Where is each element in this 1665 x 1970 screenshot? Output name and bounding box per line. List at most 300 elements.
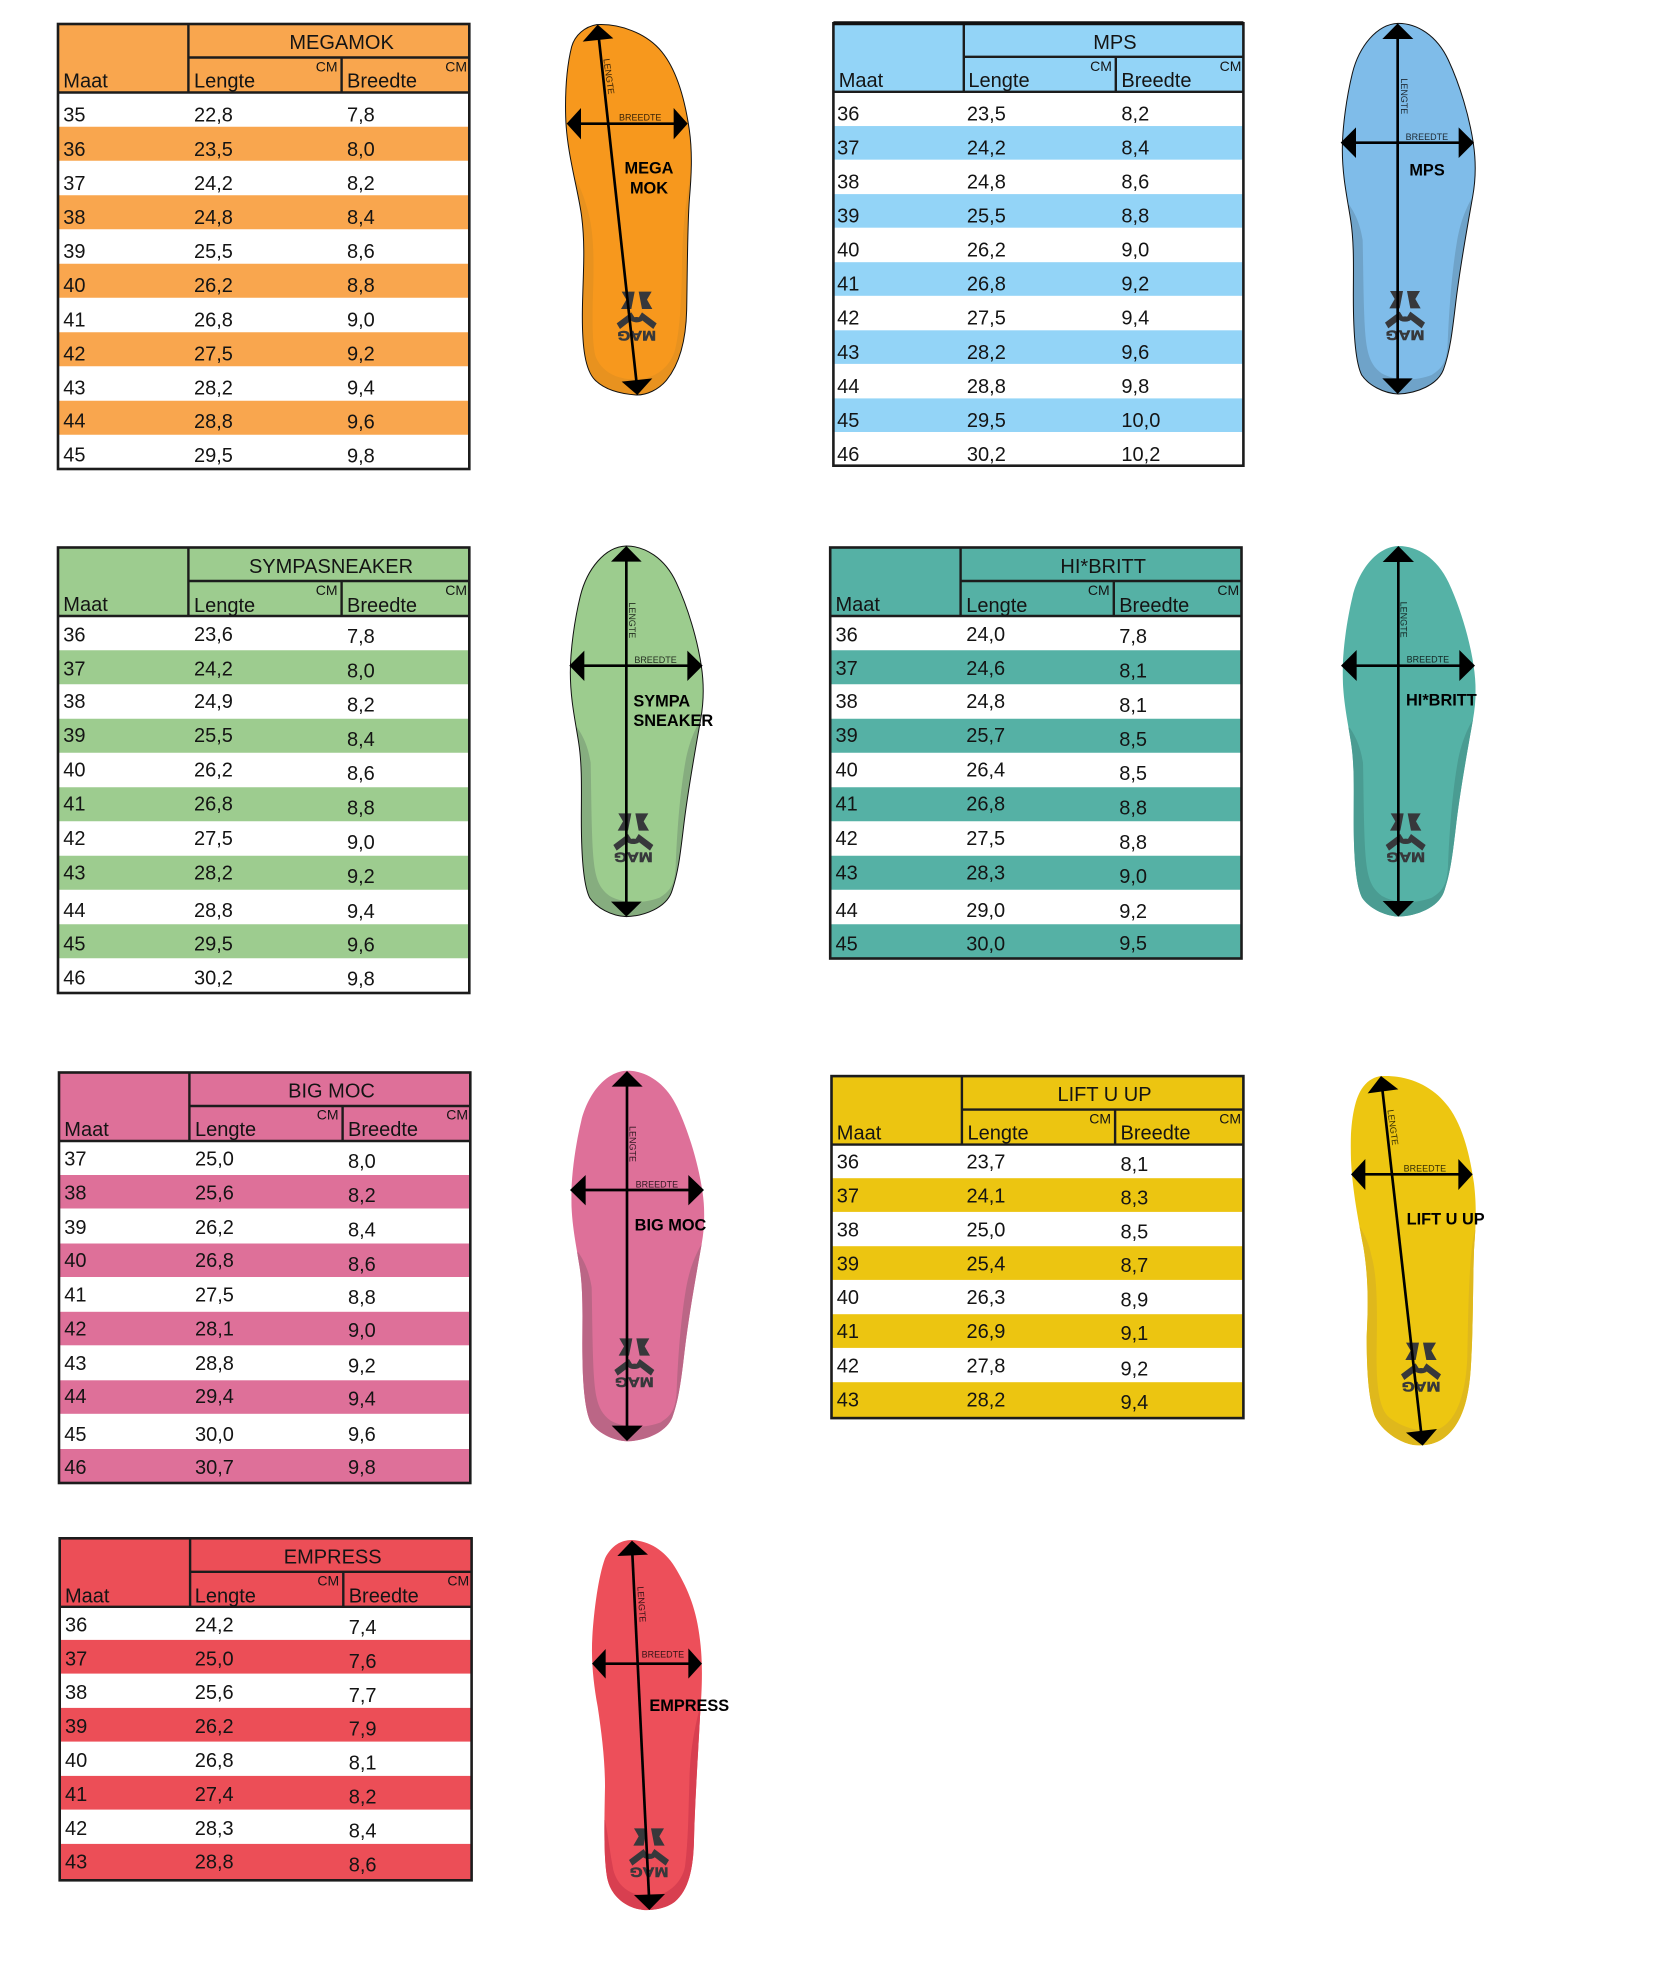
arrow: width — [592, 1648, 702, 1679]
table data: 9,2 — [1120, 1358, 1148, 1380]
table data: 9,0 — [348, 1320, 376, 1342]
table data: 37 — [836, 658, 858, 680]
table data: 26,4 — [966, 759, 1005, 781]
table data: 42 — [837, 1356, 859, 1378]
table data: 45 — [63, 933, 86, 955]
label: model name: SNEAKER — [633, 712, 713, 730]
table data: 7,7 — [349, 1685, 377, 1707]
arrow: length — [1382, 23, 1413, 394]
table data: 29,5 — [967, 410, 1006, 432]
column headers: CM — [1090, 58, 1112, 74]
table data: 7,4 — [349, 1617, 377, 1639]
table data: 25,0 — [195, 1148, 234, 1170]
table data: 8,6 — [1121, 171, 1149, 193]
table data: 8,4 — [1121, 137, 1149, 159]
sole body — [571, 1070, 704, 1442]
table data: 27,8 — [966, 1356, 1005, 1378]
column headers: Maat — [65, 1586, 110, 1608]
table data: 8,1 — [1120, 1154, 1148, 1176]
icon: MAG logo: MAG — [617, 328, 656, 344]
arrow: length — [1368, 1076, 1437, 1446]
label: breedte: BREEDTE — [634, 655, 677, 665]
insole: EMPRESS — [592, 1540, 728, 1910]
label: lengte: LENGTE — [1399, 602, 1409, 638]
table data: 37 — [65, 1648, 87, 1670]
label: lengte: LENGTE — [601, 58, 616, 95]
column headers: CM — [1219, 1110, 1241, 1126]
label: model name: HI*BRITT — [1406, 692, 1477, 710]
table data: 45 — [836, 933, 858, 955]
table data: 37 — [63, 658, 86, 680]
table data — [63, 624, 375, 990]
table data: 27,5 — [966, 828, 1005, 850]
table data: 8,2 — [347, 173, 375, 195]
table data: 8,8 — [1121, 206, 1149, 228]
table data: 25,5 — [194, 725, 233, 747]
table data: 37 — [837, 137, 859, 159]
table data: 7,6 — [349, 1651, 377, 1673]
table data: 8,1 — [1119, 660, 1147, 682]
table data: 28,8 — [195, 1353, 234, 1375]
heading: EMPRESS — [284, 1546, 382, 1568]
table data: 7,9 — [349, 1719, 377, 1741]
table data: 30,0 — [195, 1424, 234, 1446]
table data: 36 — [837, 103, 859, 125]
table data: 40 — [65, 1750, 87, 1772]
table data: 23,6 — [194, 624, 233, 646]
header band — [830, 548, 1242, 616]
table data: 9,4 — [1121, 308, 1149, 330]
table data: 24,0 — [966, 624, 1005, 646]
table data: 26,9 — [966, 1321, 1005, 1343]
table data: 8,4 — [349, 1820, 377, 1842]
table data: 8,8 — [1119, 832, 1147, 854]
column headers: CM — [316, 59, 338, 75]
table data: 25,0 — [195, 1648, 234, 1670]
sole body — [1342, 546, 1476, 917]
striped rows — [60, 1640, 472, 1880]
column headers: Breedte — [349, 1586, 419, 1608]
table data: 8,0 — [347, 139, 375, 161]
table data: 40 — [836, 759, 858, 781]
table data: 26,2 — [967, 240, 1006, 262]
table data: 9,8 — [347, 446, 375, 468]
table data: 10,2 — [1121, 444, 1160, 466]
table data: 40 — [837, 240, 859, 262]
table data: 43 — [837, 1389, 859, 1411]
table data: 8,2 — [1121, 103, 1149, 125]
column headers: CM — [1217, 582, 1239, 598]
table data: 42 — [63, 828, 86, 850]
header band — [58, 548, 469, 616]
heading: LIFT U UP — [1057, 1084, 1152, 1106]
column headers: CM — [1089, 1110, 1111, 1126]
table data: 28,2 — [194, 378, 233, 400]
table data: 29,5 — [194, 445, 233, 467]
column headers: Lengte — [194, 595, 255, 617]
table data: 9,4 — [1120, 1392, 1148, 1414]
table data: 8,2 — [347, 695, 375, 717]
table data: 38 — [64, 1183, 87, 1205]
icon: MAG logo: MAG — [1402, 1379, 1440, 1395]
column headers — [63, 59, 467, 93]
table data: 8,4 — [348, 1219, 376, 1241]
table data: 8,0 — [347, 660, 375, 682]
icon: MAG logo — [614, 1338, 654, 1391]
table data: 42 — [837, 308, 859, 330]
table data: 26,2 — [195, 1716, 234, 1738]
table data: 39 — [65, 1716, 87, 1738]
table data: 8,2 — [349, 1787, 377, 1809]
table data: 27,4 — [195, 1784, 234, 1806]
table data: 26,2 — [194, 759, 233, 781]
table data: 46 — [63, 968, 86, 990]
heading: MEGAMOK — [289, 32, 394, 54]
table data: 28,2 — [966, 1389, 1005, 1411]
label: breedte: BREEDTE — [619, 112, 661, 122]
table data: 28,3 — [966, 862, 1005, 884]
insole: SYMPA SNEAKER — [569, 546, 713, 918]
table data: 9,0 — [347, 832, 375, 854]
label: breedte: BREEDTE — [1404, 1164, 1446, 1174]
table data — [64, 1148, 376, 1479]
table data: 8,6 — [347, 763, 375, 785]
striped rows — [58, 650, 469, 958]
table data: 8,5 — [1120, 1221, 1148, 1243]
table data: 44 — [63, 411, 86, 433]
table data: 38 — [837, 171, 859, 193]
column headers — [837, 1110, 1241, 1145]
table data: 9,0 — [347, 309, 375, 331]
table data: 39 — [837, 206, 859, 228]
table data: 24,8 — [966, 691, 1005, 713]
icon: MAG logo: MAG — [1386, 327, 1424, 343]
table data: 26,8 — [967, 274, 1006, 296]
icon: MAG logo: MAG — [630, 1865, 668, 1881]
table data: 38 — [837, 1219, 859, 1241]
table data: 8,2 — [348, 1185, 376, 1207]
header band — [60, 1538, 472, 1607]
table data: 27,5 — [194, 828, 233, 850]
table data: 44 — [836, 900, 858, 922]
column headers: Breedte — [1120, 1123, 1191, 1145]
icon: MAG logo — [1401, 1343, 1441, 1395]
heading: HI*BRITT — [1060, 556, 1146, 578]
table data: 24,2 — [194, 658, 233, 680]
table data: 24,8 — [967, 171, 1006, 193]
table data: 25,4 — [966, 1253, 1005, 1275]
table data: 25,5 — [967, 206, 1006, 228]
icon: MAG logo — [1385, 291, 1425, 343]
table data: 41 — [837, 1321, 859, 1343]
table data: 8,3 — [1120, 1187, 1148, 1209]
column headers: Breedte — [347, 71, 417, 93]
label: breedte: BREEDTE — [642, 1650, 684, 1660]
insole: LIFT U UP — [1350, 1076, 1484, 1446]
table data: 9,2 — [347, 343, 375, 365]
icon: MAG logo — [617, 292, 657, 344]
table data: 9,4 — [348, 1389, 376, 1411]
table data: 7,8 — [1119, 626, 1147, 648]
arrow: length — [583, 25, 652, 395]
table data: 28,8 — [195, 1852, 234, 1874]
table data: 10,0 — [1121, 410, 1160, 432]
striped rows — [59, 1175, 470, 1483]
table data: 8,7 — [1120, 1255, 1148, 1277]
striped rows — [830, 650, 1242, 958]
heel rim — [1348, 720, 1473, 917]
table data: 36 — [836, 625, 858, 647]
table data: 8,8 — [1119, 798, 1147, 820]
table data: 7,8 — [347, 105, 375, 127]
table data: 9,2 — [347, 866, 375, 888]
table: MEGAMOK — [58, 24, 469, 469]
table data: 9,6 — [347, 935, 375, 957]
table data: 39 — [836, 725, 858, 747]
table data: 45 — [63, 445, 86, 467]
column headers: Lengte — [195, 1119, 256, 1141]
table data: 9,0 — [1119, 866, 1147, 888]
arrow: length — [617, 1541, 665, 1910]
sole outline — [1342, 23, 1475, 394]
table data: 24,1 — [966, 1186, 1005, 1208]
table data: 40 — [63, 759, 86, 781]
heel rim — [1348, 198, 1472, 394]
heading: BIG MOC — [288, 1080, 375, 1102]
sole outline — [566, 25, 691, 395]
table data: 8,5 — [1119, 763, 1147, 785]
table data: 40 — [63, 275, 86, 297]
insole: BIG MOC — [570, 1070, 706, 1442]
table data: 37 — [837, 1186, 859, 1208]
table data: 37 — [64, 1148, 87, 1170]
header band — [58, 24, 469, 92]
label: lengte: LENGTE — [628, 1126, 638, 1162]
label: model name: LIFT U UP — [1407, 1210, 1485, 1228]
table data: 9,5 — [1119, 933, 1147, 955]
table data: 26,2 — [194, 275, 233, 297]
sole body — [1342, 24, 1475, 380]
table: BIG MOC — [59, 1072, 470, 1483]
table data: 45 — [837, 410, 859, 432]
table data: 28,2 — [967, 342, 1006, 364]
table: HI*BRITT — [830, 548, 1242, 958]
column headers: Lengte — [968, 1123, 1029, 1145]
table data: 37 — [63, 173, 86, 195]
table data: 30,7 — [195, 1457, 234, 1479]
heel rim — [576, 721, 700, 916]
header band — [832, 1076, 1243, 1145]
table data: 42 — [65, 1818, 87, 1840]
table data: 44 — [64, 1386, 87, 1408]
arrow: width — [1351, 1159, 1473, 1190]
column headers: Breedte — [347, 595, 417, 617]
table data: 26,2 — [195, 1217, 234, 1239]
table data: 23,5 — [194, 139, 233, 161]
sole body — [592, 1540, 702, 1910]
column headers: CM — [445, 59, 467, 75]
label: lengte: LENGTE — [1399, 78, 1409, 114]
table data: 38 — [63, 691, 86, 713]
column headers — [839, 58, 1241, 92]
column headers: Maat — [839, 70, 884, 92]
striped rows — [833, 126, 1243, 432]
column headers — [836, 582, 1239, 617]
table data: 8,4 — [347, 729, 375, 751]
table data: 24,6 — [966, 658, 1005, 680]
table data: 23,7 — [966, 1152, 1005, 1174]
label: model name — [624, 160, 674, 198]
table data: 9,1 — [1120, 1323, 1148, 1345]
column headers: Maat — [63, 71, 108, 93]
header band — [59, 1072, 470, 1141]
insole: MPS — [1340, 22, 1476, 394]
table data: 45 — [64, 1424, 87, 1446]
table data — [63, 105, 375, 468]
column headers: CM — [446, 1107, 468, 1123]
arrow: width — [567, 108, 688, 139]
table data: 8,6 — [349, 1854, 377, 1876]
table data: 30,0 — [966, 933, 1005, 955]
table data: 26,8 — [194, 309, 233, 331]
table data: 9,6 — [347, 412, 375, 434]
arrow: length — [611, 546, 642, 917]
table data: 29,4 — [195, 1386, 234, 1408]
label: model name: MPS — [1409, 162, 1445, 180]
table data: 7,8 — [347, 626, 375, 648]
table data: 26,8 — [966, 794, 1005, 816]
table data: 8,1 — [1119, 695, 1147, 717]
table data: 9,8 — [348, 1457, 376, 1479]
table: EMPRESS — [60, 1538, 472, 1880]
table data: 8,1 — [349, 1753, 377, 1775]
table data: 41 — [64, 1284, 87, 1306]
arrow: width — [1341, 127, 1474, 158]
table data: 41 — [837, 274, 859, 296]
arrow: length — [612, 1071, 643, 1441]
label: lengte: LENGTE — [627, 602, 637, 638]
table data: 9,6 — [1121, 342, 1149, 364]
icon: MAG logo — [1386, 813, 1426, 866]
icon: MAG logo: MAG — [615, 1375, 654, 1391]
table data — [837, 103, 1160, 466]
column headers: CM — [445, 582, 467, 598]
heel rim — [575, 177, 690, 394]
table data: 9,4 — [347, 378, 375, 400]
arrow: width — [570, 1175, 704, 1205]
table data: 23,5 — [967, 103, 1006, 125]
table data: 36 — [65, 1614, 87, 1636]
column headers — [64, 1107, 468, 1141]
table data: 24,2 — [967, 137, 1006, 159]
table data: 46 — [837, 444, 859, 466]
column headers: Lengte — [195, 1586, 256, 1608]
table data: 24,2 — [194, 173, 233, 195]
insole: HI*BRITT — [1341, 546, 1477, 917]
table data: 8,8 — [347, 798, 375, 820]
table data: 42 — [63, 343, 86, 365]
table data: 9,2 — [1119, 901, 1147, 923]
striped rows — [832, 1178, 1243, 1418]
column headers: CM — [317, 1573, 339, 1589]
table data: 43 — [836, 862, 858, 884]
table: LIFT U UP — [832, 1076, 1243, 1418]
table data: 28,8 — [194, 411, 233, 433]
table data: 9,2 — [348, 1356, 376, 1378]
table data: 39 — [64, 1217, 87, 1239]
column headers: CM — [317, 1107, 338, 1123]
table data: 42 — [836, 828, 858, 850]
table data: 8,5 — [1119, 729, 1147, 751]
table data: 46 — [64, 1457, 87, 1479]
table data: 30,2 — [967, 444, 1006, 466]
label: lengte: LENGTE — [635, 1586, 648, 1623]
arrow: width — [569, 651, 703, 681]
table data: 8,8 — [348, 1287, 376, 1309]
sole body — [1350, 1076, 1476, 1446]
table data — [836, 624, 1147, 955]
table data — [65, 1614, 377, 1876]
table data: 9,4 — [347, 901, 375, 923]
table data: 26,8 — [195, 1250, 234, 1272]
column headers: Lengte — [194, 71, 255, 93]
table data: 36 — [63, 139, 86, 161]
table data: 43 — [63, 378, 86, 400]
column headers: CM — [316, 582, 338, 598]
table data: 38 — [65, 1682, 87, 1704]
table data: 25,7 — [966, 725, 1005, 747]
label: model name: SYMPA — [633, 693, 690, 711]
column headers: Maat — [837, 1123, 882, 1145]
table data: 8,4 — [347, 207, 375, 229]
column headers: Maat — [63, 594, 108, 616]
header band — [833, 23, 1243, 92]
table data: 26,8 — [195, 1750, 234, 1772]
icon: MAG logo — [629, 1828, 669, 1881]
table data: 43 — [65, 1852, 87, 1874]
table data: 8,6 — [347, 241, 375, 263]
table data: 25,5 — [194, 241, 233, 263]
label: model name: EMPRESS — [649, 1697, 729, 1715]
column headers: Maat — [64, 1119, 109, 1141]
table data: 9,2 — [1121, 274, 1149, 296]
column headers: Lengte — [966, 595, 1027, 617]
table data: 25,0 — [966, 1219, 1005, 1241]
label: model name: BIG MOC — [635, 1216, 707, 1234]
column headers: Maat — [836, 594, 880, 616]
table data: 8,6 — [348, 1254, 376, 1276]
column headers — [65, 1572, 469, 1608]
table data — [837, 1152, 1148, 1414]
icon: MAG logo — [613, 813, 653, 866]
sole body — [570, 546, 703, 902]
icon: MAG logo: MAG — [1386, 850, 1425, 866]
table data: 40 — [64, 1250, 87, 1272]
table data: 35 — [63, 105, 86, 127]
table data: 29,5 — [194, 933, 233, 955]
table data: 28,8 — [194, 900, 233, 922]
table data: 25,6 — [195, 1183, 234, 1205]
table data: 26,3 — [966, 1287, 1005, 1309]
table data: 24,9 — [194, 691, 233, 713]
table data: 27,5 — [194, 343, 233, 365]
heading: MPS — [1093, 32, 1137, 54]
arrow: width — [1341, 650, 1475, 681]
table data: 28,2 — [194, 862, 233, 884]
column headers — [63, 582, 467, 617]
icon: MAG logo: MAG — [614, 850, 653, 866]
sole body — [566, 25, 691, 380]
